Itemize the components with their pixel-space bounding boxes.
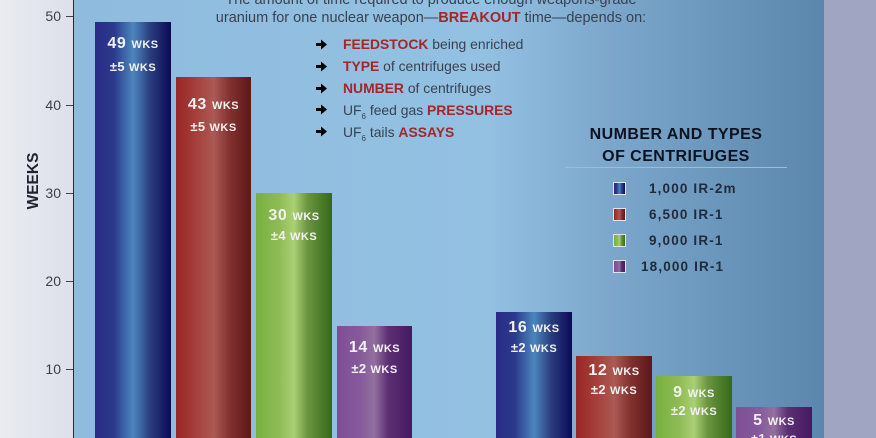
legend [565, 126, 787, 274]
y axis numbers: 50 [45, 8, 61, 24]
bar: 6,500 IR-1 12 weeks: ±2 WKS [591, 382, 637, 397]
intro text: uranium for one nuclear weapon—BREAKOUT time—depends on: [216, 10, 646, 26]
factor: number: NUMBER of centrifuges [343, 80, 491, 96]
bar: 18,000 IR-1 5 weeks: 5 WKS [753, 412, 795, 429]
bar: 9,000 IR-1 30 weeks: 30 WKS [268, 207, 320, 224]
legend item: 18,000 IR-1: 18,000 IR-1 [641, 259, 724, 274]
bar: 1,000 IR-2m 16 weeks: ±2 WKS [511, 340, 557, 355]
legend title: OF CENTRIFUGES [602, 148, 750, 164]
bar: 9,000 IR-1 30 weeks [256, 193, 332, 438]
bar: 6,500 IR-1 43 weeks: 43 WKS [188, 96, 239, 113]
factor: type: TYPE of centrifuges used [343, 58, 501, 74]
arrow bullets [316, 40, 327, 136]
factor list [316, 36, 523, 143]
bar: 9,000 IR-1 9 weeks: ±2 WKS [671, 403, 717, 418]
y axis numbers: 10 [45, 361, 61, 377]
bar: 6,500 IR-1 12 weeks: 12 WKS [588, 362, 640, 379]
bar: 6,500 IR-1 12 weeks [576, 356, 652, 438]
factor: assays: UF6 tails ASSAYS [343, 124, 454, 143]
factor: pressures: UF6 feed gas PRESSURES [343, 102, 513, 121]
y axis numbers [45, 8, 61, 377]
bar: 9,000 IR-1 30 weeks: ±4 WKS [271, 228, 317, 243]
bar: 9,000 IR-1 9 weeks: 9 WKS [673, 384, 715, 401]
bar: 6,500 IR-1 43 weeks: ±5 WKS [190, 119, 237, 134]
legend title [565, 124, 787, 168]
y axis numbers: 30 [45, 185, 61, 201]
y axis numbers: 40 [45, 97, 61, 113]
y axis line [72, 0, 74, 438]
y axis numbers: 20 [45, 273, 61, 289]
y axis ticks [45, 8, 73, 377]
bar: 1,000 IR-2m 16 weeks [496, 312, 572, 438]
legend item: 6,500 IR-1: 6,500 IR-1 [649, 207, 724, 222]
legend item: 6,500 IR-1 [613, 207, 724, 222]
factor: feedstock: FEEDSTOCK being enriched [343, 36, 523, 52]
bar: 18,000 IR-1 14 weeks [337, 326, 412, 438]
right margin band [824, 0, 876, 438]
bar: 1,000 IR-2m 49 weeks [95, 22, 171, 438]
bar: 1,000 IR-2m 49 weeks: ±5 WKS [110, 59, 156, 74]
bar: 18,000 IR-1 14 weeks: 14 WKS [349, 339, 400, 356]
legend item: 9,000 IR-1: 9,000 IR-1 [649, 233, 724, 248]
y axis label: WEEKS [25, 153, 42, 209]
bar: 6,500 IR-1 43 weeks [176, 77, 251, 438]
bar: 18,000 IR-1 5 weeks [736, 407, 812, 438]
legend title: NUMBER AND TYPES [590, 126, 762, 143]
bar: 1,000 IR-2m 16 weeks: 16 WKS [508, 319, 560, 336]
bar: 9,000 IR-1 9 weeks [656, 376, 732, 438]
bar: 18,000 IR-1 14 weeks: ±2 WKS [351, 361, 398, 376]
legend item: 1,000 IR-2m: 1,000 IR-2m [649, 181, 737, 196]
legend item: 9,000 IR-1 [613, 233, 724, 248]
bar: 1,000 IR-2m 49 weeks: 49 WKS [107, 35, 159, 52]
intro text [216, 0, 646, 26]
